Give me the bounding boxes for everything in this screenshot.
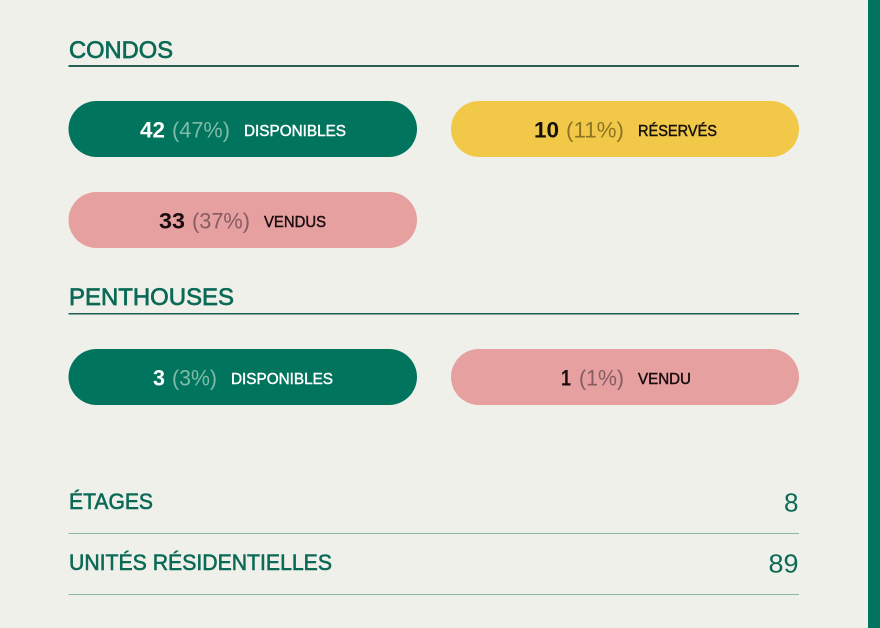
pill: 10 réservés: RÉSERVÉS: [638, 121, 717, 140]
row: étages: 8: [784, 488, 798, 518]
pill: 42 disponibles: DISPONIBLES: [244, 123, 346, 140]
pill: 1 vendu: 1: [561, 366, 571, 390]
row: unités résidentielles: UNITÉS RÉSIDENTIELLES: [69, 550, 332, 575]
pill: 1 vendu: (1%): [579, 366, 624, 390]
pill: 42 disponibles: (47%): [172, 118, 230, 142]
pill: 42 disponibles: 42: [140, 118, 165, 142]
heading: penthouses: PENTHOUSES: [69, 284, 234, 311]
pill: 33 vendus: [68, 192, 417, 248]
pill: 3 disponibles: DISPONIBLES: [231, 371, 333, 388]
pill: 3 disponibles: (3%): [172, 366, 217, 390]
pill: 42 disponibles: [68, 101, 417, 157]
pill: 1 vendu: [451, 349, 799, 405]
row: unités résidentielles: [68, 548, 799, 595]
pill: 10 réservés: 10: [534, 118, 559, 142]
row: étages: [68, 488, 799, 534]
row: unités résidentielles: 89: [768, 548, 798, 578]
right accent bar: [868, 0, 880, 628]
pill: 33 vendus: (37%): [192, 208, 250, 234]
row: étages: ÉTAGES: [69, 489, 153, 514]
section: condos: [68, 37, 799, 248]
pill: 10 réservés: (11%): [566, 118, 624, 142]
pill: 1 vendu: VENDU: [638, 371, 691, 388]
pill: 33 vendus: 33: [159, 208, 185, 234]
pill: 10 réservés: [451, 101, 799, 157]
pill: 33 vendus: VENDUS: [264, 214, 326, 231]
heading: condos: CONDOS: [69, 37, 173, 64]
pill: 3 disponibles: 3: [153, 366, 165, 390]
pill: 3 disponibles: [68, 349, 417, 405]
section: penthouses: [68, 284, 799, 405]
